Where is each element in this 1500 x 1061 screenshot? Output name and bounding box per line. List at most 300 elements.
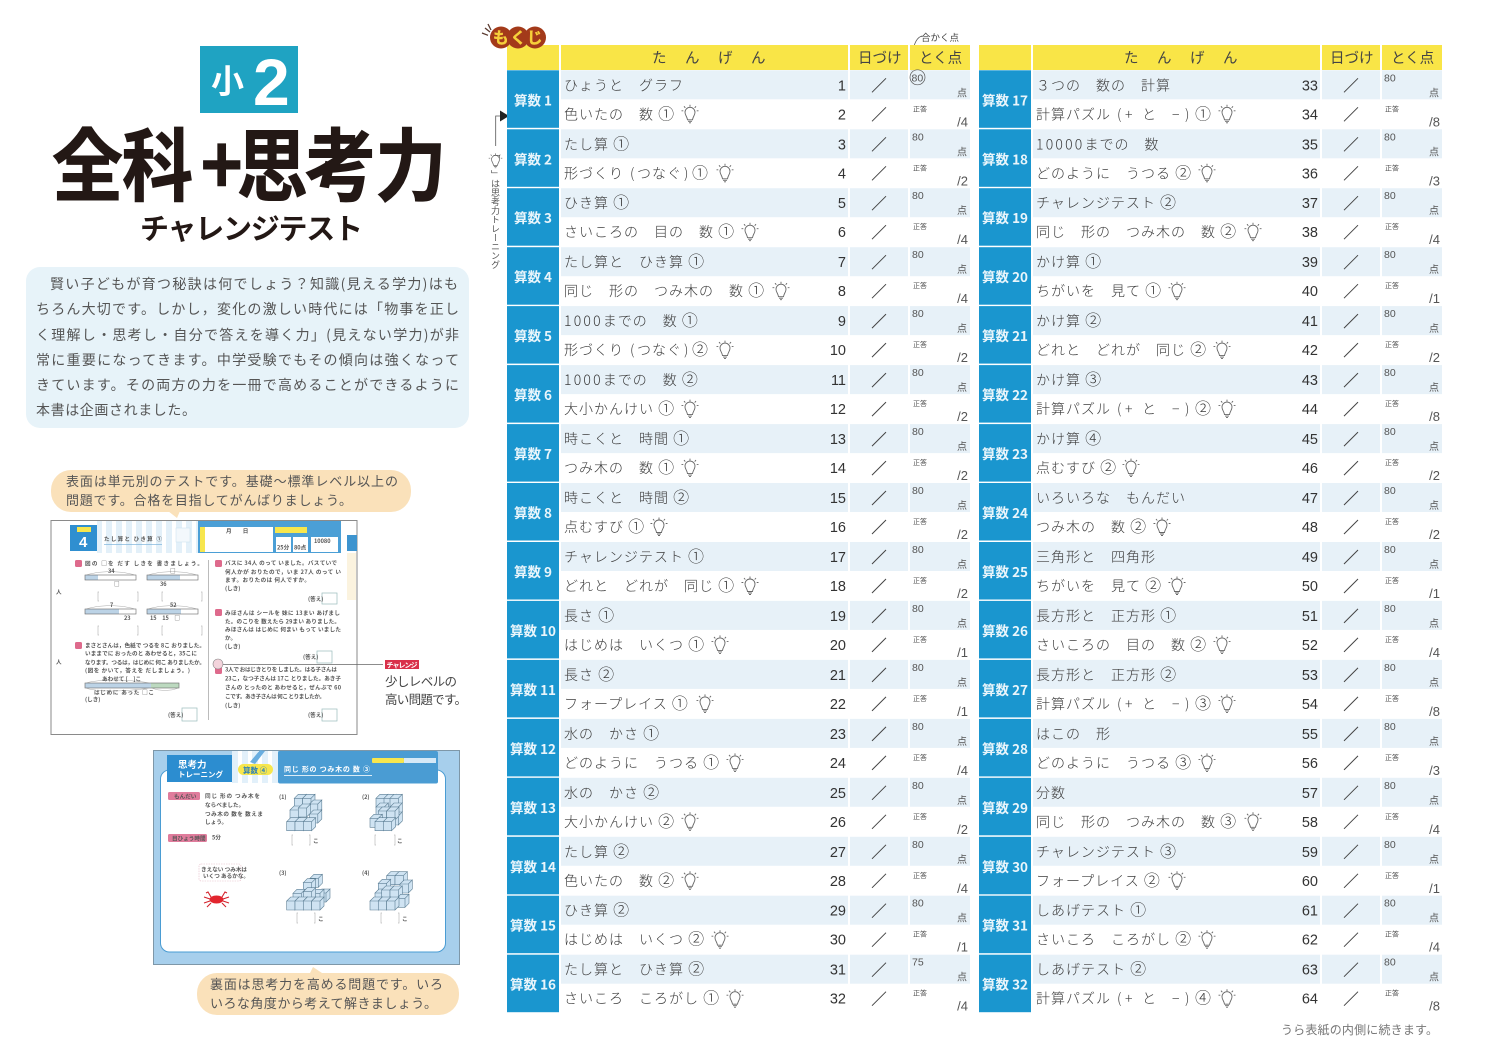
unit: 算数 2: 点 bbox=[957, 143, 967, 158]
unit: 算数 4: 7 bbox=[838, 255, 846, 271]
unit: 算数 26: 正答 bbox=[1385, 635, 1399, 645]
unit: 算数 17: ３つの 数の 計算 bbox=[1036, 75, 1171, 95]
worksheet preview: thinking training page: こ bbox=[402, 915, 408, 923]
cube stack 3 bbox=[287, 874, 330, 910]
worksheet preview: thinking training page: 5分 bbox=[212, 834, 221, 842]
unit: 算数 29: 80 bbox=[1384, 780, 1396, 792]
worksheet preview: front test page: 3人で おはじきとりを しました。はる子さんは bbox=[225, 666, 337, 674]
unit: 算数 25: /1 bbox=[1429, 586, 1440, 601]
unit: 算数 22: 正答 bbox=[1385, 399, 1399, 409]
worksheet preview: thinking training page bbox=[154, 750, 460, 964]
unit: 算数 21: /2 bbox=[1429, 350, 1440, 365]
unit: 算数 4: 算数 4 bbox=[514, 266, 552, 286]
unit: 算数 3: 80 bbox=[912, 190, 924, 202]
unit: 算数 4: 点 bbox=[957, 261, 967, 276]
unit: 算数 2: 正答 bbox=[913, 163, 927, 173]
unit: 算数 6: 1000までの 数 ② bbox=[564, 366, 699, 390]
unit: 算数 20: ちがいを 見て ① bbox=[1036, 277, 1162, 301]
unit: 算数 15: /1 bbox=[957, 940, 968, 955]
unit: 算数 17 bbox=[979, 70, 1442, 129]
unit: 算数 6: 11 bbox=[831, 373, 846, 389]
grade badge: 2 bbox=[253, 45, 290, 119]
unit: 算数 29: 正答 bbox=[1385, 812, 1399, 822]
unit: 算数 11: 長さ ② bbox=[564, 661, 615, 685]
unit: 算数 28: 正答 bbox=[1385, 753, 1399, 763]
unit: 算数 17: 点 bbox=[1429, 84, 1439, 99]
unit: 算数 16: /4 bbox=[957, 999, 968, 1014]
worksheet preview: front test page: (答え) bbox=[168, 711, 183, 719]
unit: 算数 26: 点 bbox=[1429, 615, 1439, 630]
worksheet preview: front test page: 図の □を だす しきを 書きましょう。 bbox=[85, 560, 203, 568]
worksheet preview: thinking training page: (3) bbox=[279, 869, 287, 877]
worksheet preview: front test page: はじめに あった □こ bbox=[94, 688, 154, 696]
worksheet preview: front test page: たし算と ひき算 ① bbox=[104, 535, 162, 543]
table header: right: 日づけ bbox=[1330, 47, 1374, 68]
unit: 算数 29: 分数 bbox=[1036, 783, 1066, 803]
unit: 算数 4: 正答 bbox=[913, 281, 927, 291]
unit: 算数 6 bbox=[507, 365, 970, 424]
unit: 算数 29: 算数 29 bbox=[982, 797, 1028, 817]
unit: 算数 5: 形づくり bbox=[564, 340, 624, 360]
unit: 算数 16 bbox=[507, 955, 970, 1014]
unit: 算数 32: + bbox=[1125, 989, 1134, 1009]
worksheet preview: front test page: 36 bbox=[160, 580, 167, 588]
worksheet preview: front test page: 23こ，なつ子さんは 17こ とりました。あき子 bbox=[225, 674, 341, 682]
worksheet preview: thinking training page: 同じ 形の つみ木の 数 ③ bbox=[284, 764, 370, 774]
unit: 算数 10: 算数 10 bbox=[510, 620, 556, 640]
intro text panel: ちろん大切です。しかし，変化の激しい時代には「物事を正し bbox=[36, 299, 459, 319]
unit: 算数 10: 19 bbox=[830, 609, 846, 625]
unit: 算数 10: 80 bbox=[912, 603, 924, 615]
unit: 算数 22: 算数 22 bbox=[982, 384, 1028, 404]
worksheet preview: front test page: (答え) bbox=[308, 595, 323, 603]
unit: 算数 26: さいころの 目の 数 ② bbox=[1036, 631, 1207, 655]
icon: crab bbox=[204, 892, 229, 907]
unit: 算数 2: ① bbox=[692, 159, 709, 183]
unit: 算数 26: 52 bbox=[1302, 638, 1318, 654]
unit: 算数 5: 9 bbox=[838, 314, 846, 330]
note: bulb meaning: 」は思考力トレーニング bbox=[489, 169, 502, 269]
footer note: うら表紙の内側に続きます。 bbox=[1281, 1021, 1438, 1038]
unit: 算数 27: /8 bbox=[1429, 704, 1440, 719]
unit: 算数 20: 80 bbox=[1384, 249, 1396, 261]
unit: 算数 32: 算数 32 bbox=[982, 974, 1028, 994]
unit: 算数 5: 点 bbox=[957, 320, 967, 335]
unit: 算数 11: /1 bbox=[957, 704, 968, 719]
unit: 算数 16: 75 bbox=[912, 957, 924, 969]
unit: 算数 27: 長方形と 正方形 ② bbox=[1036, 661, 1177, 685]
unit: 算数 15: 29 bbox=[830, 904, 846, 920]
intro text panel: きています。その両方の力を一冊で高めることができるように bbox=[36, 375, 459, 395]
unit: 算数 6: /2 bbox=[957, 409, 968, 424]
passing score note: 合かく点 bbox=[921, 30, 960, 44]
callout: front side: 問題です。合格を目指してがんばりましょう。 bbox=[66, 490, 352, 509]
unit: 算数 30: 80 bbox=[1384, 839, 1396, 851]
unit: 算数 27: − bbox=[1172, 694, 1180, 714]
unit: 算数 32: しあげテスト ② bbox=[1036, 956, 1147, 980]
unit: 算数 23: /2 bbox=[1429, 468, 1440, 483]
unit: 算数 1: 点 bbox=[957, 84, 967, 99]
worksheet preview: front test page: バスに 34人 のって いました。バスていで bbox=[225, 559, 337, 567]
unit: 算数 4: 8 bbox=[838, 284, 846, 300]
unit: 算数 17: と bbox=[1142, 104, 1157, 124]
unit: 算数 27: + bbox=[1125, 694, 1134, 714]
note: bulb meaning bbox=[489, 110, 509, 269]
unit: 算数 10: 点 bbox=[957, 615, 967, 630]
unit: 算数 27: 算数 27 bbox=[982, 679, 1028, 699]
unit: 算数 22 bbox=[979, 365, 1442, 424]
unit: 算数 3: ひき算 ① bbox=[564, 189, 630, 213]
unit: 算数 13 bbox=[507, 778, 970, 837]
unit: 算数 20: 算数 20 bbox=[982, 266, 1028, 286]
unit: 算数 6: 大小かんけい ① bbox=[564, 395, 675, 419]
unit: 算数 3 bbox=[507, 188, 970, 247]
unit: 算数 2: ) bbox=[684, 163, 689, 183]
unit: 算数 4: 同じ 形の つみ木の 数 ① bbox=[564, 277, 765, 301]
unit: 算数 2: たし算 ① bbox=[564, 130, 630, 154]
unit: 算数 24: 点 bbox=[1429, 497, 1439, 512]
unit: 算数 21: 算数 21 bbox=[982, 325, 1028, 345]
unit: 算数 22: と bbox=[1142, 399, 1157, 419]
table header: right: とく点 bbox=[1391, 47, 1434, 68]
worksheet preview: thinking training page: いくつ あるかな。 bbox=[203, 872, 249, 880]
unit: 算数 28: はこの 形 bbox=[1036, 724, 1111, 744]
callout: back side bbox=[197, 967, 459, 1015]
unit: 算数 30: 60 bbox=[1302, 874, 1318, 890]
worksheet preview: front test page: 人 bbox=[56, 658, 62, 666]
unit: 算数 14: 80 bbox=[912, 839, 924, 851]
unit: 算数 27: 53 bbox=[1302, 668, 1318, 684]
unit: 算数 19: 同じ 形の つみ木の 数 ② bbox=[1036, 218, 1237, 242]
unit: 算数 17: ( bbox=[1117, 104, 1122, 124]
unit: 算数 23: 点 bbox=[1429, 438, 1439, 453]
unit: 算数 32: 80 bbox=[1384, 957, 1396, 969]
unit: 算数 3: 点 bbox=[957, 202, 967, 217]
worksheet preview: front test page: 25分 bbox=[277, 544, 290, 552]
unit: 算数 11: 80 bbox=[912, 662, 924, 674]
unit: 算数 7 bbox=[507, 424, 970, 483]
worksheet preview: front test page: 15 15 □ bbox=[150, 614, 180, 622]
worksheet preview: front test page: (答え) bbox=[308, 711, 323, 719]
unit: 算数 5: 80 bbox=[912, 308, 924, 320]
unit: 算数 2: 形づくり bbox=[564, 163, 624, 183]
unit: 算数 19 bbox=[979, 188, 1442, 247]
contents badge: もくじ bbox=[493, 26, 543, 48]
unit: 算数 9: 算数 9 bbox=[514, 561, 552, 581]
unit: 算数 1: 算数 1 bbox=[514, 89, 552, 109]
unit: 算数 2: 算数 2 bbox=[514, 148, 552, 168]
unit: 算数 18: 算数 18 bbox=[982, 148, 1028, 168]
worksheet preview: front test page: なります。つるは，はじめに 何こ ありましたか。 bbox=[85, 658, 205, 666]
unit: 算数 6: 正答 bbox=[913, 399, 927, 409]
unit: 算数 15: 算数 15 bbox=[510, 915, 556, 935]
unit: 算数 30: チャレンジテスト ③ bbox=[1036, 838, 1177, 862]
unit: 算数 16: たし算と ひき算 ② bbox=[564, 956, 705, 980]
unit: 算数 4 bbox=[507, 247, 970, 306]
unit: 算数 26 bbox=[979, 601, 1442, 660]
unit: 算数 31: 正答 bbox=[1385, 930, 1399, 940]
worksheet preview: front test page: 4 bbox=[79, 534, 88, 551]
unit: 算数 7: 正答 bbox=[913, 458, 927, 468]
unit: 算数 12: どのように うつる ① bbox=[564, 749, 720, 773]
worksheet preview: front test page: 10080 bbox=[314, 537, 331, 545]
unit: 算数 19: 80 bbox=[1384, 190, 1396, 202]
unit: 算数 7: /2 bbox=[957, 468, 968, 483]
unit: 算数 32 bbox=[979, 955, 1442, 1014]
unit: 算数 28: 80 bbox=[1384, 721, 1396, 733]
intro text panel: 常に重要になってきます。中学受験でもその傾向は強くなって bbox=[36, 350, 459, 370]
unit: 算数 15: 80 bbox=[912, 898, 924, 910]
unit: 算数 28: /3 bbox=[1429, 763, 1440, 778]
unit: 算数 12: 23 bbox=[830, 727, 846, 743]
unit: 算数 4: たし算と ひき算 ① bbox=[564, 248, 705, 272]
unit: 算数 11: 算数 11 bbox=[510, 679, 556, 699]
unit: 算数 22: ) bbox=[1185, 399, 1190, 419]
unit: 算数 13: /2 bbox=[957, 822, 968, 837]
unit: 算数 29: 点 bbox=[1429, 792, 1439, 807]
unit: 算数 13: 正答 bbox=[913, 812, 927, 822]
unit: 算数 14 bbox=[507, 837, 970, 896]
unit: 算数 7: 13 bbox=[830, 432, 846, 448]
unit: 算数 26: 51 bbox=[1302, 609, 1318, 625]
unit: 算数 6: 80 bbox=[912, 367, 924, 379]
unit: 算数 26: /4 bbox=[1429, 645, 1440, 660]
unit: 算数 13: 26 bbox=[830, 815, 846, 831]
unit: 算数 27: 点 bbox=[1429, 674, 1439, 689]
unit: 算数 23 bbox=[979, 424, 1442, 483]
worksheet preview: thinking training page: つみ木の 数を 数えま bbox=[205, 810, 263, 818]
unit: 算数 28: 算数 28 bbox=[982, 738, 1028, 758]
unit: 算数 6: 算数 6 bbox=[514, 384, 552, 404]
unit: 算数 9: 80 bbox=[912, 544, 924, 556]
title: 全科+思考力 bbox=[52, 103, 446, 218]
unit: 算数 30: 算数 30 bbox=[982, 856, 1028, 876]
unit: 算数 16: 正答 bbox=[913, 989, 927, 999]
worksheet preview: front test page: か。 bbox=[225, 634, 236, 642]
unit: 算数 13: 点 bbox=[957, 792, 967, 807]
unit: 算数 21: 42 bbox=[1302, 343, 1318, 359]
unit: 算数 4: /4 bbox=[957, 291, 968, 306]
unit: 算数 22: 43 bbox=[1302, 373, 1318, 389]
unit: 算数 25: 50 bbox=[1302, 579, 1318, 595]
unit: 算数 17: 正答 bbox=[1385, 104, 1399, 114]
unit: 算数 2: つなぐ bbox=[637, 163, 682, 183]
unit: 算数 20: /1 bbox=[1429, 291, 1440, 306]
unit: 算数 32: 63 bbox=[1302, 963, 1318, 979]
unit: 算数 24: 48 bbox=[1302, 520, 1318, 536]
unit: 算数 26: 算数 26 bbox=[982, 620, 1028, 640]
unit: 算数 9: 17 bbox=[830, 550, 846, 566]
unit: 算数 14: 点 bbox=[957, 851, 967, 866]
unit: 算数 9: 正答 bbox=[913, 576, 927, 586]
unit: 算数 12 bbox=[507, 719, 970, 778]
unit: 算数 25 bbox=[979, 542, 1442, 601]
table header: left: とく点 bbox=[919, 47, 962, 68]
worksheet preview: thinking training page: (2) bbox=[362, 793, 370, 801]
unit: 算数 17: 算数 17 bbox=[982, 89, 1028, 109]
intro text panel: 本書は企画されました。 bbox=[36, 400, 196, 420]
unit: 算数 18: 80 bbox=[1384, 131, 1396, 143]
unit: 算数 14: 色いたの 数 ② bbox=[564, 867, 675, 891]
worksheet preview: thinking training page: (1) bbox=[279, 793, 287, 801]
unit: 算数 21: かけ算 ② bbox=[1036, 307, 1102, 331]
unit: 算数 17: − bbox=[1172, 104, 1180, 124]
unit: 算数 23: かけ算 ④ bbox=[1036, 425, 1102, 449]
unit: 算数 11: 正答 bbox=[913, 694, 927, 704]
unit: 算数 29 bbox=[979, 778, 1442, 837]
challenge note: チャレンジ bbox=[386, 660, 418, 670]
unit: 算数 7: 14 bbox=[830, 461, 846, 477]
unit: 算数 2 bbox=[507, 129, 970, 188]
unit: 算数 32: /8 bbox=[1429, 999, 1440, 1014]
challenge note: 高い問題です。 bbox=[385, 689, 467, 708]
unit: 算数 29: 58 bbox=[1302, 815, 1318, 831]
unit: 算数 29: 同じ 形の つみ木の 数 ③ bbox=[1036, 808, 1237, 832]
unit: 算数 32: − bbox=[1172, 989, 1180, 1009]
unit: 算数 25: 正答 bbox=[1385, 576, 1399, 586]
unit: 算数 5: 算数 5 bbox=[514, 325, 552, 345]
worksheet preview: thinking training page: こ bbox=[318, 915, 324, 923]
unit: 算数 7: 点 bbox=[957, 438, 967, 453]
worksheet preview: front test page: (図を かいて，答えを だしましょう。) bbox=[85, 666, 190, 674]
unit: 算数 23: 正答 bbox=[1385, 458, 1399, 468]
unit: 算数 17: /8 bbox=[1429, 114, 1440, 129]
contents table: left bbox=[507, 70, 970, 1014]
worksheet preview: front test page: 23 bbox=[124, 614, 131, 622]
unit: 算数 23: 46 bbox=[1302, 461, 1318, 477]
challenge note: 少しレベルの bbox=[385, 671, 457, 690]
unit: 算数 15: 30 bbox=[830, 933, 846, 949]
worksheet preview: thinking training page: こ bbox=[313, 837, 319, 845]
unit: 算数 12: 80 bbox=[912, 721, 924, 733]
unit: 算数 18: 36 bbox=[1302, 166, 1318, 182]
unit: 算数 27: ( bbox=[1117, 694, 1122, 714]
table header: right bbox=[979, 45, 1442, 70]
unit: 算数 22: − bbox=[1172, 399, 1180, 419]
unit: 算数 13: 水の かさ ② bbox=[564, 779, 660, 803]
unit: 算数 24: 算数 24 bbox=[982, 502, 1028, 522]
callout: front side bbox=[51, 470, 411, 518]
unit: 算数 6: 点 bbox=[957, 379, 967, 394]
worksheet preview: front test page: □ bbox=[170, 567, 176, 575]
unit: 算数 24: 正答 bbox=[1385, 517, 1399, 527]
unit: 算数 30: 点 bbox=[1429, 851, 1439, 866]
callout: back side: いろな角度から考えて解きましょう。 bbox=[210, 993, 437, 1012]
unit: 算数 2: 80 bbox=[912, 131, 924, 143]
unit: 算数 19: 37 bbox=[1302, 196, 1318, 212]
unit: 算数 5: /2 bbox=[957, 350, 968, 365]
cube stack 1 bbox=[287, 794, 322, 831]
unit: 算数 13: 大小かんけい ② bbox=[564, 808, 675, 832]
unit: 算数 31: 62 bbox=[1302, 933, 1318, 949]
unit: 算数 9 bbox=[507, 542, 970, 601]
worksheet preview: thinking training page: きえない つみ木は bbox=[201, 866, 247, 874]
unit: 算数 13: 25 bbox=[830, 786, 846, 802]
unit: 算数 6: 12 bbox=[830, 402, 846, 418]
unit: 算数 22: 80 bbox=[1384, 367, 1396, 379]
worksheet preview: thinking training page: 思考力 bbox=[178, 757, 207, 771]
unit: 算数 8: 点 bbox=[957, 497, 967, 512]
unit: 算数 17: 計算パズル bbox=[1036, 104, 1111, 124]
unit: 算数 5: 10 bbox=[830, 343, 846, 359]
unit: 算数 8: 点むすび ① bbox=[564, 513, 645, 537]
unit: 算数 10: /1 bbox=[957, 645, 968, 660]
unit: 算数 1: ひょうと グラフ bbox=[564, 75, 684, 95]
unit: 算数 16: 算数 16 bbox=[510, 974, 556, 994]
callout: front side: 表面は単元別のテストです。基礎～標準レベル以上の bbox=[66, 471, 398, 490]
unit: 算数 8: 80 bbox=[912, 485, 924, 497]
worksheet preview: front test page: ます。おりたのは 何人ですか。 bbox=[225, 576, 310, 584]
unit: 算数 25: ちがいを 見て ② bbox=[1036, 572, 1162, 596]
unit: 算数 3: 正答 bbox=[913, 222, 927, 232]
unit: 算数 14: 正答 bbox=[913, 871, 927, 881]
worksheet preview: thinking training page: しょう。 bbox=[205, 818, 227, 826]
unit: 算数 18: 正答 bbox=[1385, 163, 1399, 173]
unit: 算数 14: 算数 14 bbox=[510, 856, 556, 876]
unit: 算数 31: /4 bbox=[1429, 940, 1440, 955]
unit: 算数 32: 64 bbox=[1302, 992, 1318, 1008]
table header: left: 日づけ bbox=[858, 47, 902, 68]
intro text panel: 賢い子どもが育つ秘訣は何でしょう？知識(見える学力)はも bbox=[50, 274, 458, 294]
unit: 算数 31: 80 bbox=[1384, 898, 1396, 910]
unit: 算数 32: ( bbox=[1117, 989, 1122, 1009]
worksheet preview: front test page: みほさんは シールを 妹に 13まい あげまし bbox=[225, 609, 340, 617]
unit: 算数 5: ② bbox=[692, 336, 709, 360]
unit: 算数 22: ( bbox=[1117, 399, 1122, 419]
unit: 算数 1: 1 bbox=[838, 78, 846, 94]
unit: 算数 9: 点 bbox=[957, 556, 967, 571]
unit: 算数 15: 正答 bbox=[913, 930, 927, 940]
unit: 算数 14: /4 bbox=[957, 881, 968, 896]
unit: 算数 12: 点 bbox=[957, 733, 967, 748]
unit: 算数 28: どのように うつる ③ bbox=[1036, 749, 1192, 773]
unit: 算数 22: かけ算 ③ bbox=[1036, 366, 1102, 390]
unit: 算数 11: 21 bbox=[830, 668, 846, 684]
worksheet preview: front test page: 34 bbox=[108, 567, 115, 575]
unit: 算数 27: 正答 bbox=[1385, 694, 1399, 704]
unit: 算数 16: 31 bbox=[830, 963, 846, 979]
unit: 算数 1 bbox=[507, 70, 970, 129]
unit: 算数 28 bbox=[979, 719, 1442, 778]
unit: 算数 12: /4 bbox=[957, 763, 968, 778]
unit: 算数 32: 点 bbox=[1429, 969, 1439, 984]
table header: left: たんげん bbox=[652, 47, 784, 68]
unit: 算数 4: 80 bbox=[912, 249, 924, 261]
worksheet preview: front test page: (しき) bbox=[225, 584, 240, 592]
unit: 算数 8: 正答 bbox=[913, 517, 927, 527]
unit: 算数 17: 80 bbox=[1384, 72, 1396, 84]
unit: 算数 11: フォープレイス ① bbox=[564, 690, 689, 714]
worksheet preview: thinking training page: もんだい bbox=[174, 792, 197, 800]
unit: 算数 28: 55 bbox=[1302, 727, 1318, 743]
unit: 算数 23: 80 bbox=[1384, 426, 1396, 438]
unit: 算数 26: 長方形と 正方形 ① bbox=[1036, 602, 1177, 626]
unit: 算数 13: 80 bbox=[912, 780, 924, 792]
unit: 算数 11 bbox=[507, 660, 970, 719]
worksheet preview: front test page: さんの とったのと あわせると，ぜんぶで 60 bbox=[225, 684, 342, 692]
unit: 算数 24: 80 bbox=[1384, 485, 1396, 497]
unit: 算数 27: ) bbox=[1185, 694, 1190, 714]
unit: 算数 20: 40 bbox=[1302, 284, 1318, 300]
unit: 算数 19: チャレンジテスト ② bbox=[1036, 189, 1177, 213]
unit: 算数 11: 22 bbox=[830, 697, 846, 713]
unit: 算数 21 bbox=[979, 306, 1442, 365]
unit: 算数 8 bbox=[507, 483, 970, 542]
unit: 算数 23: 点むすび ② bbox=[1036, 454, 1117, 478]
passing score note bbox=[912, 30, 960, 71]
unit: 算数 14: たし算 ② bbox=[564, 838, 630, 862]
unit: 算数 19: 点 bbox=[1429, 202, 1439, 217]
